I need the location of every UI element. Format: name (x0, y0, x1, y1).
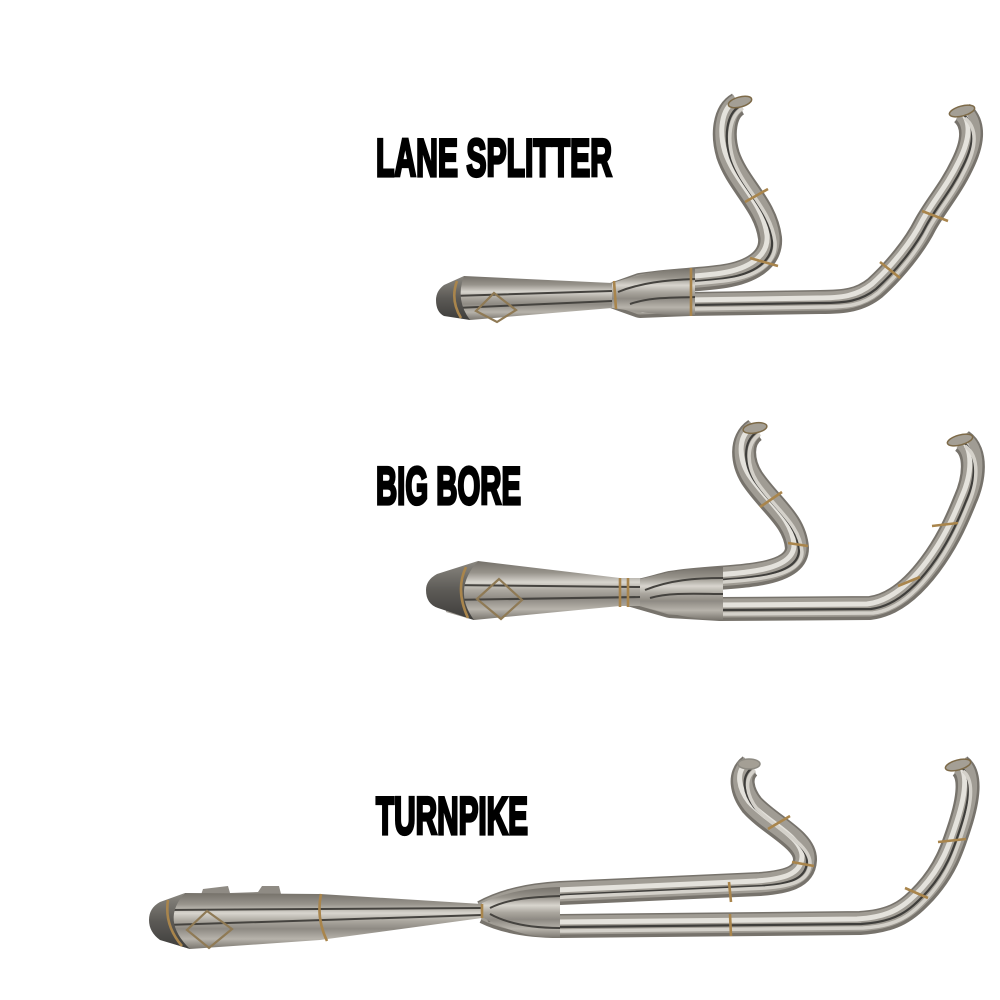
exhaust: Turnpike (149, 757, 972, 949)
front header pipe (622, 421, 802, 596)
title: Lane Splitter: LANE SPLITTER (376, 129, 612, 188)
collector (482, 887, 560, 938)
weld seams (454, 189, 948, 318)
title: Turnpike: TURNPIKE (376, 787, 528, 846)
weld seams (461, 492, 958, 618)
muffler body (444, 561, 640, 620)
muffler mounting bracket (200, 886, 281, 906)
muffler end cap (426, 561, 478, 620)
diamond logo (187, 911, 232, 948)
diamond logo (476, 293, 516, 322)
collector (612, 268, 695, 316)
rear header pipe (609, 103, 976, 311)
rear header pipe (622, 432, 976, 614)
exhaust: Lane Splitter (436, 94, 976, 322)
muffler end cap (149, 893, 190, 949)
rear header pipe (482, 757, 972, 931)
muffler end cap (436, 276, 470, 320)
weld seams (167, 816, 966, 946)
title: Big Bore: BIG BORE (376, 457, 521, 516)
front header pipe (480, 759, 810, 916)
muffler body (448, 276, 612, 320)
collector (640, 567, 723, 620)
muffler body (158, 893, 482, 949)
front header pipe (609, 94, 775, 299)
exhaust: Big Bore (426, 421, 976, 620)
diamond logo (477, 579, 522, 619)
